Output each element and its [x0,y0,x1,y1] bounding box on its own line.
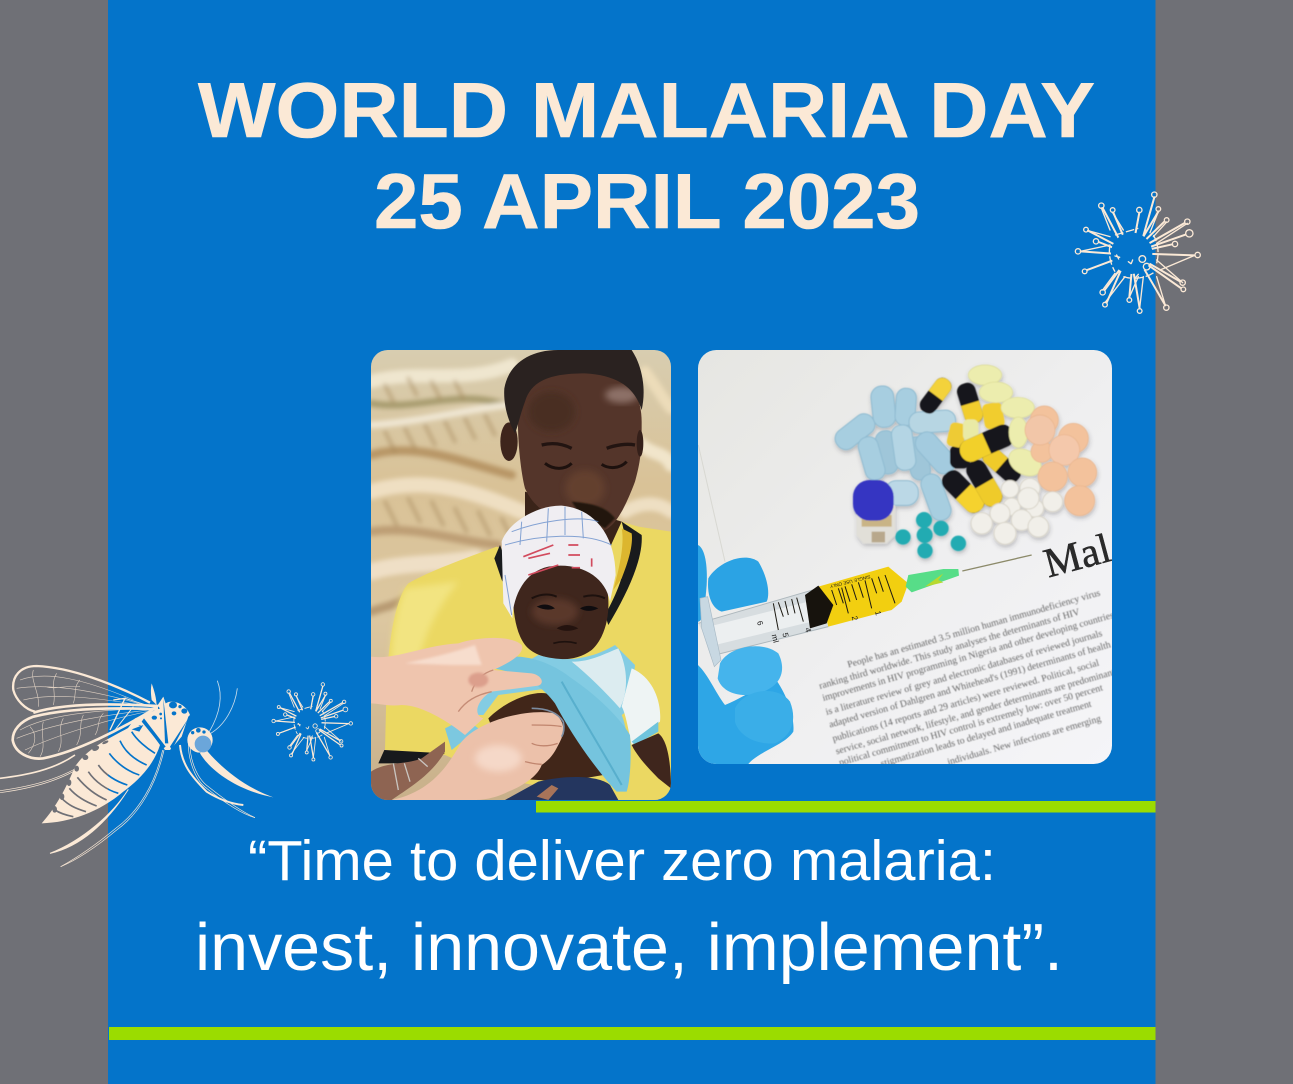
head and proboscis [200,748,273,797]
photo: father and baby with stethoscope [371,350,671,800]
herringbone thatch strands [385,378,512,538]
wing trailing feathers [0,755,75,778]
paper paragraph: is a literature review of grey and electronic databases of reviewed journals [824,628,1104,718]
paper paragraph: improvements in HIV programming in Nigeria and other developing countries [821,610,1115,704]
green divider lower [109,1027,1156,1040]
pale yellow tablets [968,365,1046,481]
abdomen spots [52,740,109,813]
syringe numbers: 1 [873,610,883,617]
white tablets [971,478,1063,544]
teal pills [895,512,966,558]
abdomen bands [55,732,155,817]
syringe numbers: SINGLE USE ONLY [829,574,871,589]
paper paragraph: stigmatization leads to delayed and inadequate treatment [879,699,1093,770]
baby blue drape [493,656,631,792]
syringe numbers: 4 [803,627,813,634]
man shirt [385,522,671,800]
paper paragraph: service, social network, lifestyle, and gender determinants are predominant [834,667,1116,757]
hub [906,569,959,592]
man hair [504,350,644,433]
title line 2: 25 APRIL 2023 [374,157,920,245]
syringe numbers [755,574,883,644]
baby blue clothing base [477,645,635,729]
legs [50,743,255,867]
doctor hands [371,638,542,735]
thatch background [371,350,671,800]
glove front fingers [698,646,794,764]
vial [853,480,895,543]
paper paragraph [818,588,1116,770]
syringe numbers: 2 [850,615,860,622]
photo: syringe and malaria pills on paper [698,350,1116,770]
syringe numbers: ml [770,633,781,644]
orange tablets [1025,406,1097,516]
table and paper background [698,350,1112,764]
thorax markings [132,698,188,750]
wing veins [17,670,155,757]
quote [195,829,1063,985]
syringe numbers: 6 [755,620,765,627]
paper paragraph: ranking third worldwide. This study analyses the determinants of HIV [818,607,1081,692]
paper title: Mal [1039,526,1116,587]
quote line 1: “Time to deliver zero malaria: [248,829,996,893]
syringe [698,555,1032,667]
baby headwrap [502,506,616,618]
title line 1: WORLD MALARIA DAY [198,66,1095,154]
plunger [805,586,833,628]
icon: virus top right [1075,192,1200,313]
pills [831,365,1097,558]
illustration: mosquito [0,666,273,867]
blue pills [831,385,960,523]
scale marks [773,575,895,630]
paper paragraph: publications (14 reports and 29 articles) were reviewed. Political, social [831,658,1101,745]
barrel [698,588,828,655]
baby head [513,565,608,659]
paper paragraph: political commitment to HIV control is extremely low: over 50 percent [838,682,1104,769]
green divider upper [536,801,1156,812]
quote line 2: invest, innovate, implement”. [195,910,1063,985]
paper paragraph: individuals. New infections are emerging [946,713,1103,768]
man neck and face [525,492,622,546]
needle [962,555,1032,571]
black and yellow capsules [917,374,1024,517]
yellow liquid [818,567,908,627]
title [198,66,1095,245]
glove back fingers [698,545,768,622]
abdomen [42,725,160,823]
paper paragraph: People has an estimated 3.5 million human immunodeficiency virus [846,588,1102,671]
upper wing [13,666,150,712]
icon: virus near mosquito [272,683,353,761]
syringe numbers: 5 [780,632,790,639]
shirt collar [605,522,642,625]
wings [0,666,157,793]
paper paragraph: adapted version of Dahlgren and Whitehead's (1991) determinants of health [828,639,1112,731]
antennae [209,681,237,733]
thorax [127,683,190,750]
baby belly and arm [488,693,603,782]
